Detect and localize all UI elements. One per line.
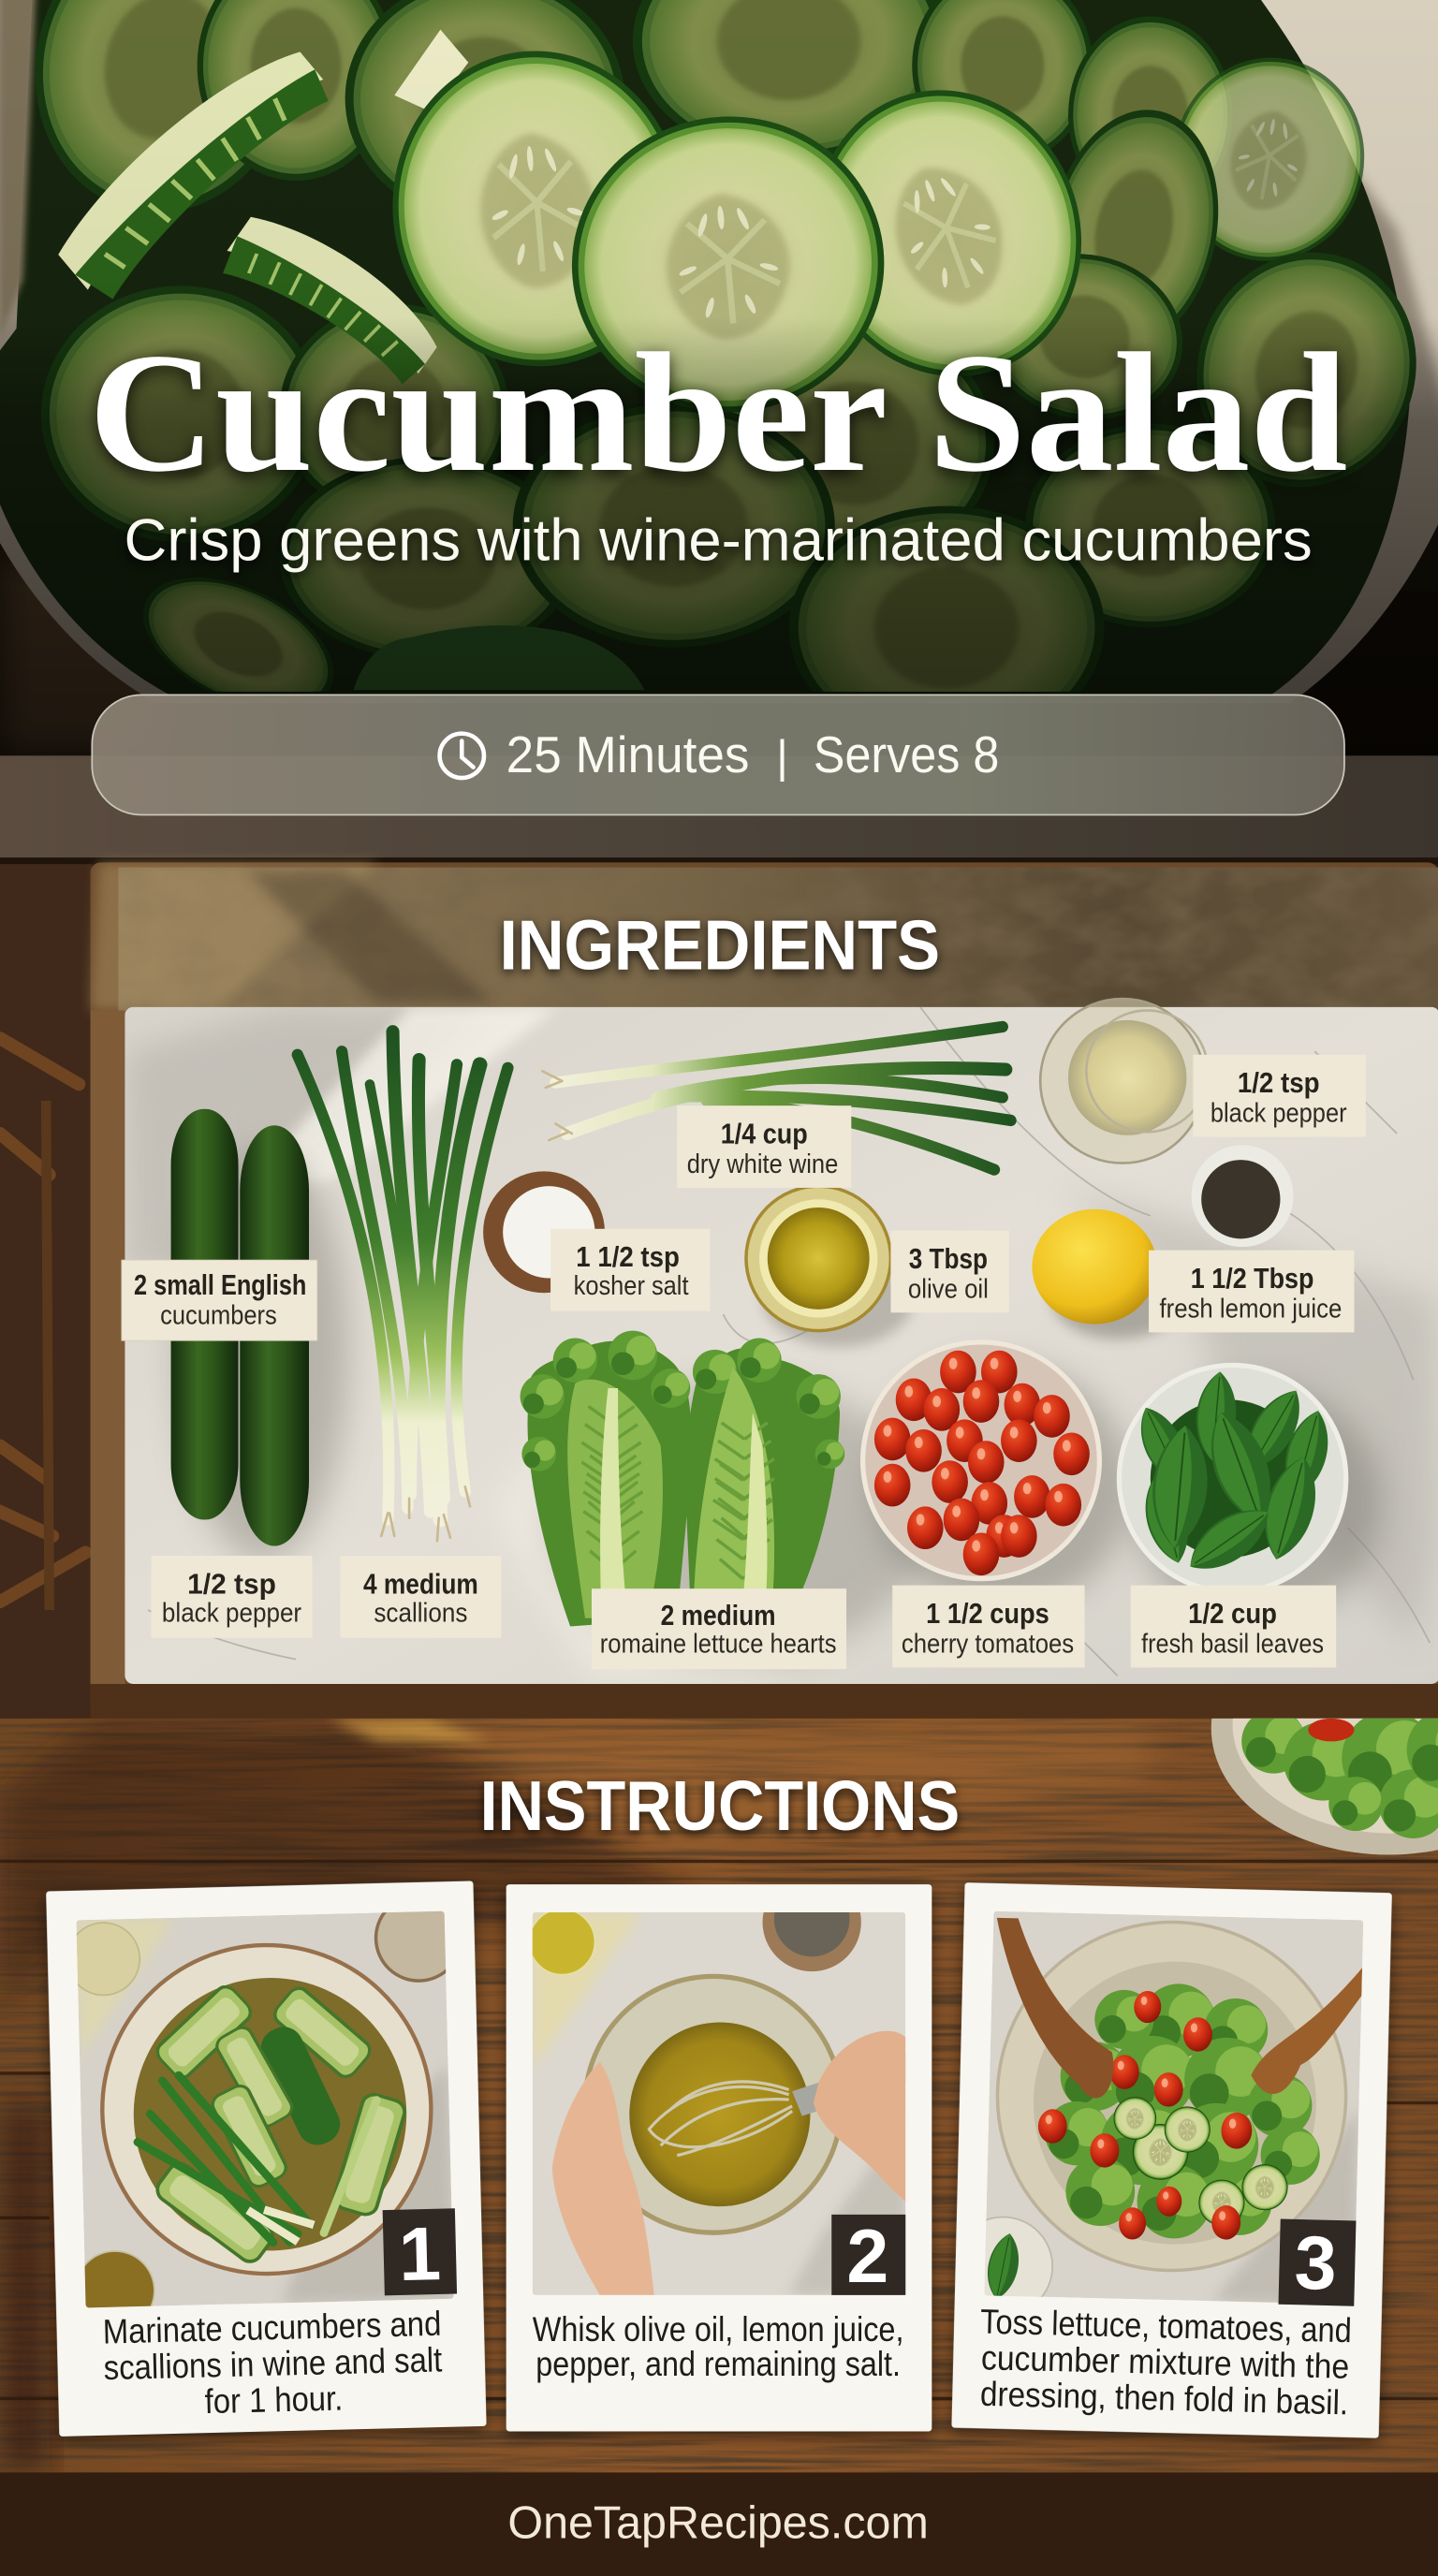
panel: ingredients board (91, 862, 1438, 1719)
label: lemon juice: 1 1/2 Tbsp (1191, 1262, 1313, 1295)
ingredient: basil plate (1119, 1365, 1346, 1592)
label: romaine lettuce hearts (592, 1588, 846, 1669)
ingredient: scallions horizontal (542, 1027, 1011, 1170)
label: black pepper right: black pepper (1211, 1099, 1347, 1129)
step number 1: 1 (398, 2212, 442, 2297)
step 2 text (533, 2310, 903, 2383)
label: kosher salt: kosher salt (574, 1271, 689, 1301)
heading: instructions: INSTRUCTIONS (480, 1766, 960, 1845)
label: dry white wine (677, 1105, 851, 1188)
label: 2 small English cucumbers: 2 small English (134, 1268, 306, 1301)
label: lemon juice (1149, 1251, 1354, 1332)
ingredient: salt bowl (483, 1171, 605, 1293)
step 3 text: dressing, then fold in basil. (980, 2375, 1349, 2422)
label: romaine lettuce hearts: romaine lettuce hearts (600, 1630, 837, 1660)
icon: clock (440, 734, 484, 778)
label: olive oil: olive oil (908, 1275, 989, 1305)
band behind time pill (0, 755, 1438, 857)
label: olive oil (890, 1231, 1009, 1312)
label: black pepper left: black pepper (162, 1598, 301, 1628)
step card 1 (46, 1881, 487, 2437)
hero: cucumber bowl photo (0, 0, 1438, 755)
ingredient: white wine glass (1040, 999, 1208, 1164)
time and servings pill: | (776, 732, 788, 783)
label: lemon juice: fresh lemon juice (1159, 1295, 1342, 1325)
label: black pepper right: 1/2 tsp (1238, 1066, 1320, 1099)
label: olive oil: 3 Tbsp (909, 1242, 988, 1275)
label: dry white wine: dry white wine (687, 1149, 838, 1179)
step 1 photo (77, 1911, 453, 2308)
title: Cucumber Salad (89, 318, 1347, 507)
step number 3 (1278, 2218, 1356, 2306)
ingredient: cucumbers (171, 1109, 309, 1546)
step 2 photo (532, 1912, 906, 2295)
step 1 text: for 1 hour. (204, 2379, 344, 2421)
marble slab (125, 1007, 1438, 1684)
step 3 text: cucumber mixture with the (981, 2338, 1350, 2386)
step number 3: 3 (1294, 2221, 1338, 2306)
step 3 text (978, 2303, 1352, 2422)
label: cherry tomatoes: 1 1/2 cups (926, 1597, 1049, 1630)
ingredient: cherry tomatoes bowl (863, 1342, 1099, 1579)
step 1 text: Marinate cucumbers and (102, 2305, 442, 2351)
step 1 text (102, 2305, 444, 2423)
step number 1 (383, 2208, 457, 2298)
label: dry white wine: 1/4 cup (721, 1118, 808, 1150)
hero darkening overlay (0, 0, 1438, 755)
step 2 text: pepper, and remaining salt. (536, 2345, 901, 2383)
label: black pepper left: 1/2 tsp (187, 1567, 276, 1600)
label: cherry tomatoes: cherry tomatoes (902, 1630, 1074, 1660)
footer bar (0, 2472, 1438, 2576)
label: fresh basil leaves: 1/2 cup (1188, 1597, 1277, 1630)
label: kosher salt (550, 1229, 710, 1311)
step card 2 (506, 1873, 932, 2432)
label: scallions (340, 1556, 501, 1638)
salad bowl corner (1211, 1719, 1438, 1855)
left dark wood and rods (0, 864, 92, 1719)
time and servings pill: 25 Minutes (506, 726, 749, 783)
label: fresh basil leaves (1131, 1586, 1336, 1667)
ingredient: olive oil bowl (746, 1186, 890, 1331)
footer bar: OneTapRecipes.com (507, 2498, 929, 2549)
time and servings pill: Serves 8 (814, 726, 999, 783)
step number 2: 2 (846, 2215, 888, 2299)
step number 2 (831, 2215, 905, 2299)
time and servings pill (92, 695, 1344, 815)
label: scallions: 4 medium (363, 1567, 478, 1600)
ingredient: lemon (1032, 1209, 1157, 1325)
ingredient: scallions bunch (298, 1032, 507, 1541)
step 1 text: scallions in wine and salt (103, 2340, 443, 2387)
panel: instructions wood background (0, 1719, 1438, 2473)
label: 2 small English cucumbers: cucumbers (160, 1301, 277, 1331)
label: kosher salt: 1 1/2 tsp (576, 1240, 680, 1273)
label: cherry tomatoes (892, 1586, 1085, 1667)
heading: ingredients: INGREDIENTS (500, 906, 940, 985)
label: 2 small English cucumbers (122, 1260, 317, 1340)
step card 3 (950, 1882, 1392, 2438)
step 2 text: Whisk olive oil, lemon juice, (533, 2310, 903, 2349)
label: black pepper left (151, 1556, 313, 1638)
step 3 photo (953, 1910, 1363, 2324)
ingredient: romaine lettuce (521, 1331, 844, 1627)
subtitle: Crisp greens with wine-marinated cucumbers (125, 507, 1313, 573)
step 3 text: Toss lettuce, tomatoes, and (980, 2303, 1352, 2349)
label: fresh basil leaves: fresh basil leaves (1141, 1630, 1324, 1660)
label: scallions: scallions (374, 1598, 467, 1628)
label: romaine lettuce hearts: 2 medium (661, 1599, 776, 1632)
ingredient: pepper bowl (1192, 1145, 1294, 1247)
label: black pepper right (1193, 1055, 1366, 1137)
